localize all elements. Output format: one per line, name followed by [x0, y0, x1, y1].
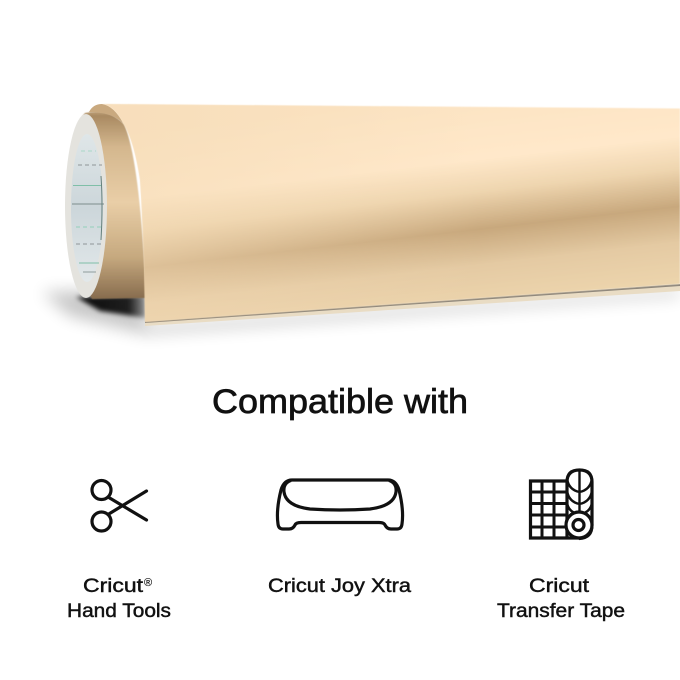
item: Cricut Joy Xtra [268, 480, 411, 597]
sheet left fade [102, 104, 680, 322]
roll end: liner ring [65, 114, 107, 298]
floor shadow [42, 290, 680, 334]
label line two: Transfer Tape [497, 601, 625, 622]
label: Cricut Joy Xtra [268, 576, 411, 597]
heading: Compatible with [212, 383, 468, 421]
sheet curl top [89, 104, 123, 123]
vinyl sheet front [102, 104, 680, 322]
liner grid lines [72, 151, 104, 272]
roll core opening [71, 134, 103, 282]
icon: scissors [92, 480, 146, 531]
item: Cricut Hand Tools [67, 480, 171, 622]
label line two: Hand Tools [67, 601, 171, 622]
label: Cricut [83, 576, 144, 597]
item: Cricut Transfer Tape [497, 470, 625, 622]
product: vinyl roll [42, 104, 680, 334]
icon: machine [277, 480, 403, 529]
icon: transfer tape [530, 470, 592, 538]
label: Cricut [529, 576, 590, 597]
contact shadow under roll [76, 295, 146, 318]
roll inner wrap [66, 112, 146, 299]
sheet underside edge [145, 285, 680, 326]
registered mark: ® [144, 577, 152, 589]
